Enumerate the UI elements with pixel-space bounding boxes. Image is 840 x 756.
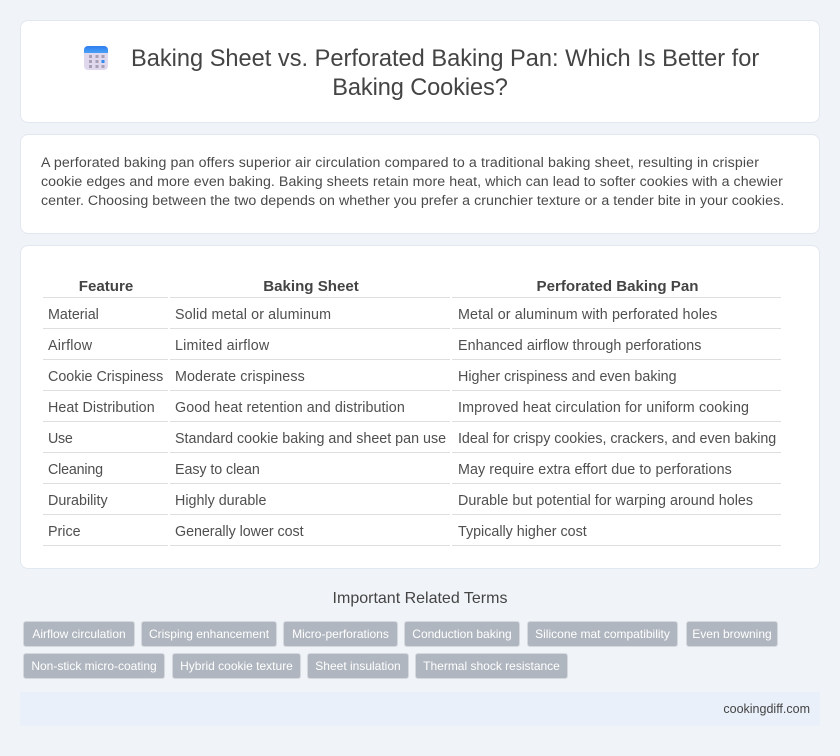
text block: description: center. Choosing between the two depends on whether you prefer a crunchier texture or a tender bite in your cookies. (41, 193, 784, 209)
tag (283, 621, 398, 647)
row: durability (48, 493, 753, 509)
tag (172, 653, 301, 679)
row: cookie crispiness (48, 369, 677, 385)
row: material (48, 307, 717, 323)
tag (23, 653, 165, 679)
heading: related terms: Important Related Terms (333, 590, 507, 607)
text block: description: cookie edges and more even baking. Baking sheets retain more heat, which can lead to softer cookies with a chewier (41, 174, 783, 190)
table header (79, 278, 698, 295)
row: durability: Durable but potential for warping around holes (458, 493, 753, 509)
table header: Perforated Baking Pan (537, 278, 698, 295)
tag (527, 621, 678, 647)
text block: description: A perforated baking pan offers superior air circulation compared to a traditional baking sheet, resulting in crispier (41, 155, 759, 171)
footer credit: cookingdiff.com (723, 702, 810, 716)
row: airflow: Limited airflow (175, 338, 269, 354)
row: cookie crispiness: Higher crispiness and even baking (458, 369, 677, 385)
row: cleaning: Cleaning (48, 462, 103, 478)
tag: Airflow circulation (32, 627, 126, 641)
panel: description (20, 134, 820, 234)
row: durability: Highly durable (175, 493, 266, 509)
icon: calendar (84, 46, 108, 70)
row: durability: Durability (48, 493, 108, 509)
tag (415, 653, 568, 679)
tag (404, 621, 520, 647)
row: cookie crispiness: Cookie Crispiness (48, 369, 163, 385)
row: airflow (48, 338, 701, 354)
tag (307, 653, 409, 679)
tag: Even browning (692, 627, 772, 641)
tag: Thermal shock resistance (423, 659, 560, 673)
row: price: Typically higher cost (458, 524, 587, 540)
row: material: Solid metal or aluminum (175, 307, 331, 323)
title (131, 46, 759, 101)
row: heat distribution: Improved heat circulation for uniform cooking (458, 400, 749, 416)
row: heat distribution: Heat Distribution (48, 400, 155, 416)
row: heat distribution (48, 400, 749, 416)
row: cleaning (48, 462, 732, 478)
row: use (48, 431, 776, 447)
panel: comparison table (20, 245, 820, 569)
row: heat distribution: Good heat retention and distribution (175, 400, 405, 416)
footer (20, 692, 820, 726)
tag: Hybrid cookie texture (180, 659, 293, 673)
row: material: Material (48, 307, 99, 323)
row: use: Standard cookie baking and sheet pan use (175, 431, 446, 447)
tag: Silicone mat compatibility (535, 627, 670, 641)
tag (686, 621, 778, 647)
row: price: Generally lower cost (175, 524, 304, 540)
tag: Conduction baking (412, 627, 512, 641)
row: price: Price (48, 524, 81, 540)
tag (141, 621, 277, 647)
row: cleaning: Easy to clean (175, 462, 260, 478)
row: use: Ideal for crispy cookies, crackers, and even baking (458, 431, 776, 447)
panel: header (20, 20, 820, 123)
table header: Baking Sheet (263, 278, 359, 295)
row: material: Metal or aluminum with perforated holes (458, 307, 717, 323)
tag list: related terms (23, 621, 778, 679)
row: airflow: Airflow (48, 338, 92, 354)
row: use: Use (48, 431, 73, 447)
row: airflow: Enhanced airflow through perforations (458, 338, 701, 354)
row: cleaning: May require extra effort due to perforations (458, 462, 732, 478)
title: Baking Cookies? (332, 75, 508, 101)
table header: Feature (79, 278, 133, 295)
tag: Crisping enhancement (149, 627, 269, 641)
tag: Non-stick micro-coating (31, 659, 157, 673)
row: price (48, 524, 587, 540)
tag (23, 621, 135, 647)
tag: Micro-perforations (292, 627, 389, 641)
row: cookie crispiness: Moderate crispiness (175, 369, 305, 385)
tag: Sheet insulation (315, 659, 401, 673)
text block: description (41, 155, 784, 209)
title: Baking Sheet vs. Perforated Baking Pan: Which Is Better for (131, 46, 759, 72)
